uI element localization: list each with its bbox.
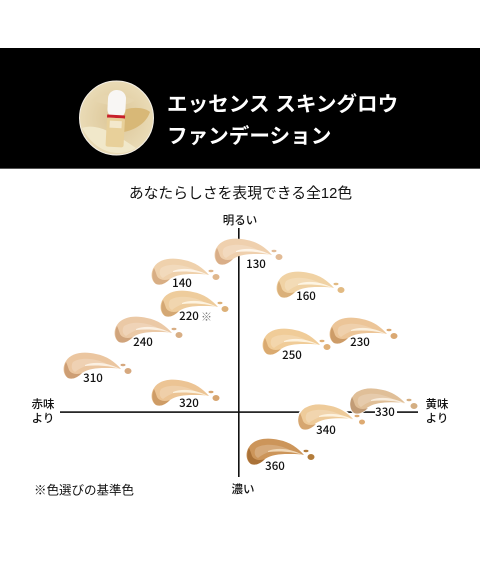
swatch 230 (330, 318, 398, 344)
title: エッセンス スキングロウ (167, 92, 398, 116)
mark 220: ※ (201, 312, 212, 324)
label 250: 250 (282, 347, 302, 363)
label 130: 130 (246, 256, 266, 272)
swatch 160 (277, 272, 344, 298)
swatch 360 (247, 439, 314, 465)
label 330: 330 (375, 404, 395, 420)
title: ファンデーション (167, 124, 331, 148)
label 140: 140 (172, 275, 192, 291)
chart: colour map (32, 212, 449, 498)
title (167, 92, 398, 148)
axis label: red: 赤味 (32, 396, 55, 412)
swatch 320 (152, 380, 220, 406)
label 230: 230 (350, 334, 370, 350)
swatch 250 (263, 329, 330, 355)
axis label: light: 明るい (223, 212, 257, 228)
axis label: dark: 濃い (232, 481, 254, 497)
swatch 340 (298, 404, 366, 430)
note: ※色選びの基準色 (34, 480, 134, 498)
label 240: 240 (133, 334, 153, 350)
header band (0, 48, 480, 169)
axis label: red: より (32, 410, 54, 426)
swatch 240 (115, 317, 182, 343)
swatch 130 (215, 239, 282, 265)
label 320: 320 (179, 395, 199, 411)
subheading: あなたらしさを表現できる全12色 (129, 185, 352, 202)
label 310: 310 (83, 370, 103, 386)
label 160: 160 (296, 288, 316, 304)
label 360: 360 (265, 458, 285, 474)
swatch 140 (152, 259, 220, 285)
swatch 330 (350, 388, 418, 414)
swatch 220 (161, 291, 228, 317)
label 340: 340 (316, 422, 336, 438)
label 220: 220 (179, 308, 199, 324)
icon: product bottle in circle (80, 81, 154, 155)
swatch 310 (64, 353, 132, 379)
axis label: red (32, 396, 55, 426)
axes (60, 228, 418, 477)
axis label: yellow: 黄味 (426, 396, 449, 412)
axis label: yellow: より (426, 410, 448, 426)
axis label: yellow (426, 396, 449, 426)
